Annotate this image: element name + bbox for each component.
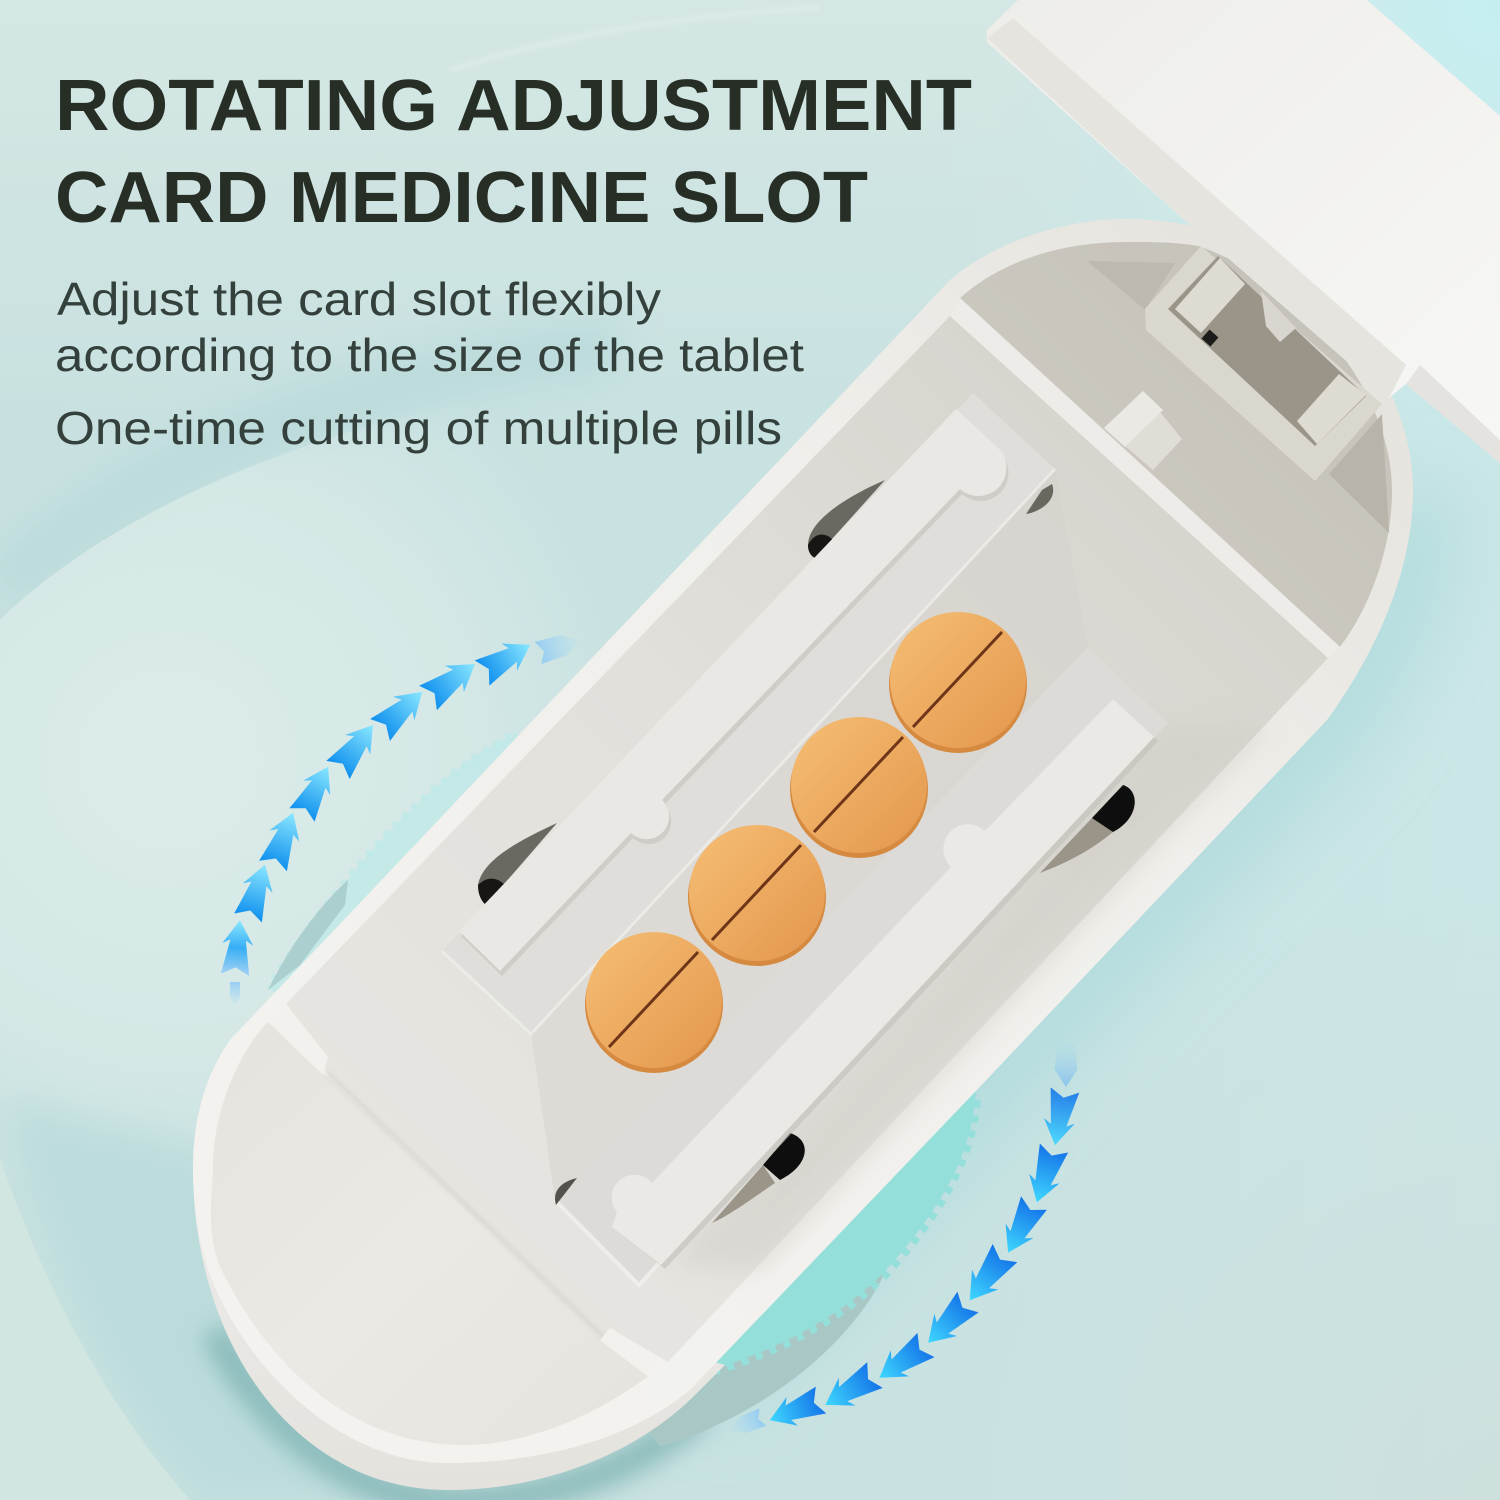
- arrow faded tail: [230, 982, 240, 1006]
- blade slot top right: [1026, 484, 1053, 514]
- lid front band: [987, 18, 1406, 398]
- blade slot lower left: [555, 1178, 577, 1205]
- blade slot upper left: [478, 823, 557, 905]
- rotation arrows upper left: [220, 629, 583, 1006]
- arrow 3: [258, 807, 308, 872]
- lower compartment: [211, 1022, 650, 1445]
- pill 3: [790, 717, 928, 858]
- arrow 7: [418, 651, 485, 711]
- title: CARD MEDICINE SLOT: [55, 158, 868, 238]
- arrow 1: [220, 919, 255, 976]
- hinge opening: [1168, 256, 1366, 446]
- pill 1: [585, 932, 723, 1073]
- upper white strip: [459, 409, 1006, 971]
- lower plate base: [555, 647, 1168, 1285]
- lower white strip: [612, 699, 1154, 1265]
- divider post: [1104, 391, 1182, 470]
- pill 4: [889, 612, 1027, 753]
- arrow 3: [994, 1196, 1048, 1260]
- hinge frame: [1145, 246, 1382, 481]
- divider bump right: [600, 1328, 667, 1378]
- tray floor soft divider line: [327, 1073, 607, 1340]
- upper plate light edge: [442, 469, 1055, 1034]
- top recess right: [1329, 414, 1389, 533]
- arrow 5: [917, 1291, 979, 1354]
- arrow faded start: [1055, 1043, 1077, 1087]
- rotation arrows lower right: [726, 1043, 1080, 1439]
- hinge dark gap: [1202, 330, 1218, 346]
- lid right lip: [1406, 365, 1500, 463]
- blade slot lower right: [1040, 785, 1135, 873]
- arrow 7: [817, 1361, 883, 1419]
- lower plate light edge: [555, 1200, 660, 1285]
- arrow 4: [288, 759, 342, 822]
- pill cutter body: [193, 219, 1413, 1490]
- lid top face: [987, 0, 1500, 463]
- upper strip shadow: [461, 414, 1008, 976]
- arrow 2: [233, 860, 280, 923]
- lid: [987, 0, 1500, 463]
- description text: One-time cutting of multiple pills: [55, 402, 782, 454]
- arrow 4: [956, 1243, 1018, 1310]
- title: ROTATING ADJUSTMENT: [55, 66, 972, 146]
- body rim surface: [193, 219, 1413, 1463]
- top recess left: [1087, 261, 1175, 310]
- arrow 6: [870, 1332, 935, 1391]
- main tray: [283, 316, 1328, 1362]
- lower strip shadow: [612, 699, 1158, 1269]
- arrow 2: [1022, 1143, 1069, 1207]
- description text: Adjust the card slot flexibly: [57, 273, 661, 325]
- body side wall: [193, 1167, 725, 1490]
- arrow 9 faded: [535, 629, 583, 664]
- description text: [55, 273, 804, 454]
- upper plate base: [442, 393, 1055, 1034]
- divider bump left: [268, 1000, 328, 1075]
- blade slot lower middle: [712, 1133, 805, 1223]
- description text: according to the size of the tablet: [55, 329, 804, 381]
- lower-right dial shadow: [640, 1270, 886, 1447]
- arrow 5: [325, 715, 386, 780]
- hinge piece lower: [1297, 374, 1366, 444]
- upper compartment: [960, 242, 1392, 647]
- blade slot upper right: [808, 480, 885, 558]
- body ground shadow: [215, 1330, 700, 1500]
- arrow 8: [764, 1386, 827, 1434]
- shaded tray floor: [670, 725, 1270, 1270]
- pill channel: [531, 469, 1088, 1200]
- arrow 1: [1040, 1087, 1080, 1148]
- divider wall: [950, 298, 1340, 658]
- title: [55, 66, 972, 238]
- arrow faded end: [726, 1408, 766, 1439]
- upper-left toothed dial: [268, 733, 560, 1000]
- arrow 6: [369, 680, 433, 742]
- pill 2: [688, 825, 826, 966]
- arrow 8: [474, 631, 538, 687]
- lower-right toothed dial: [700, 1080, 976, 1370]
- hinge tab: [1261, 291, 1296, 342]
- hinge piece upper: [1175, 258, 1245, 333]
